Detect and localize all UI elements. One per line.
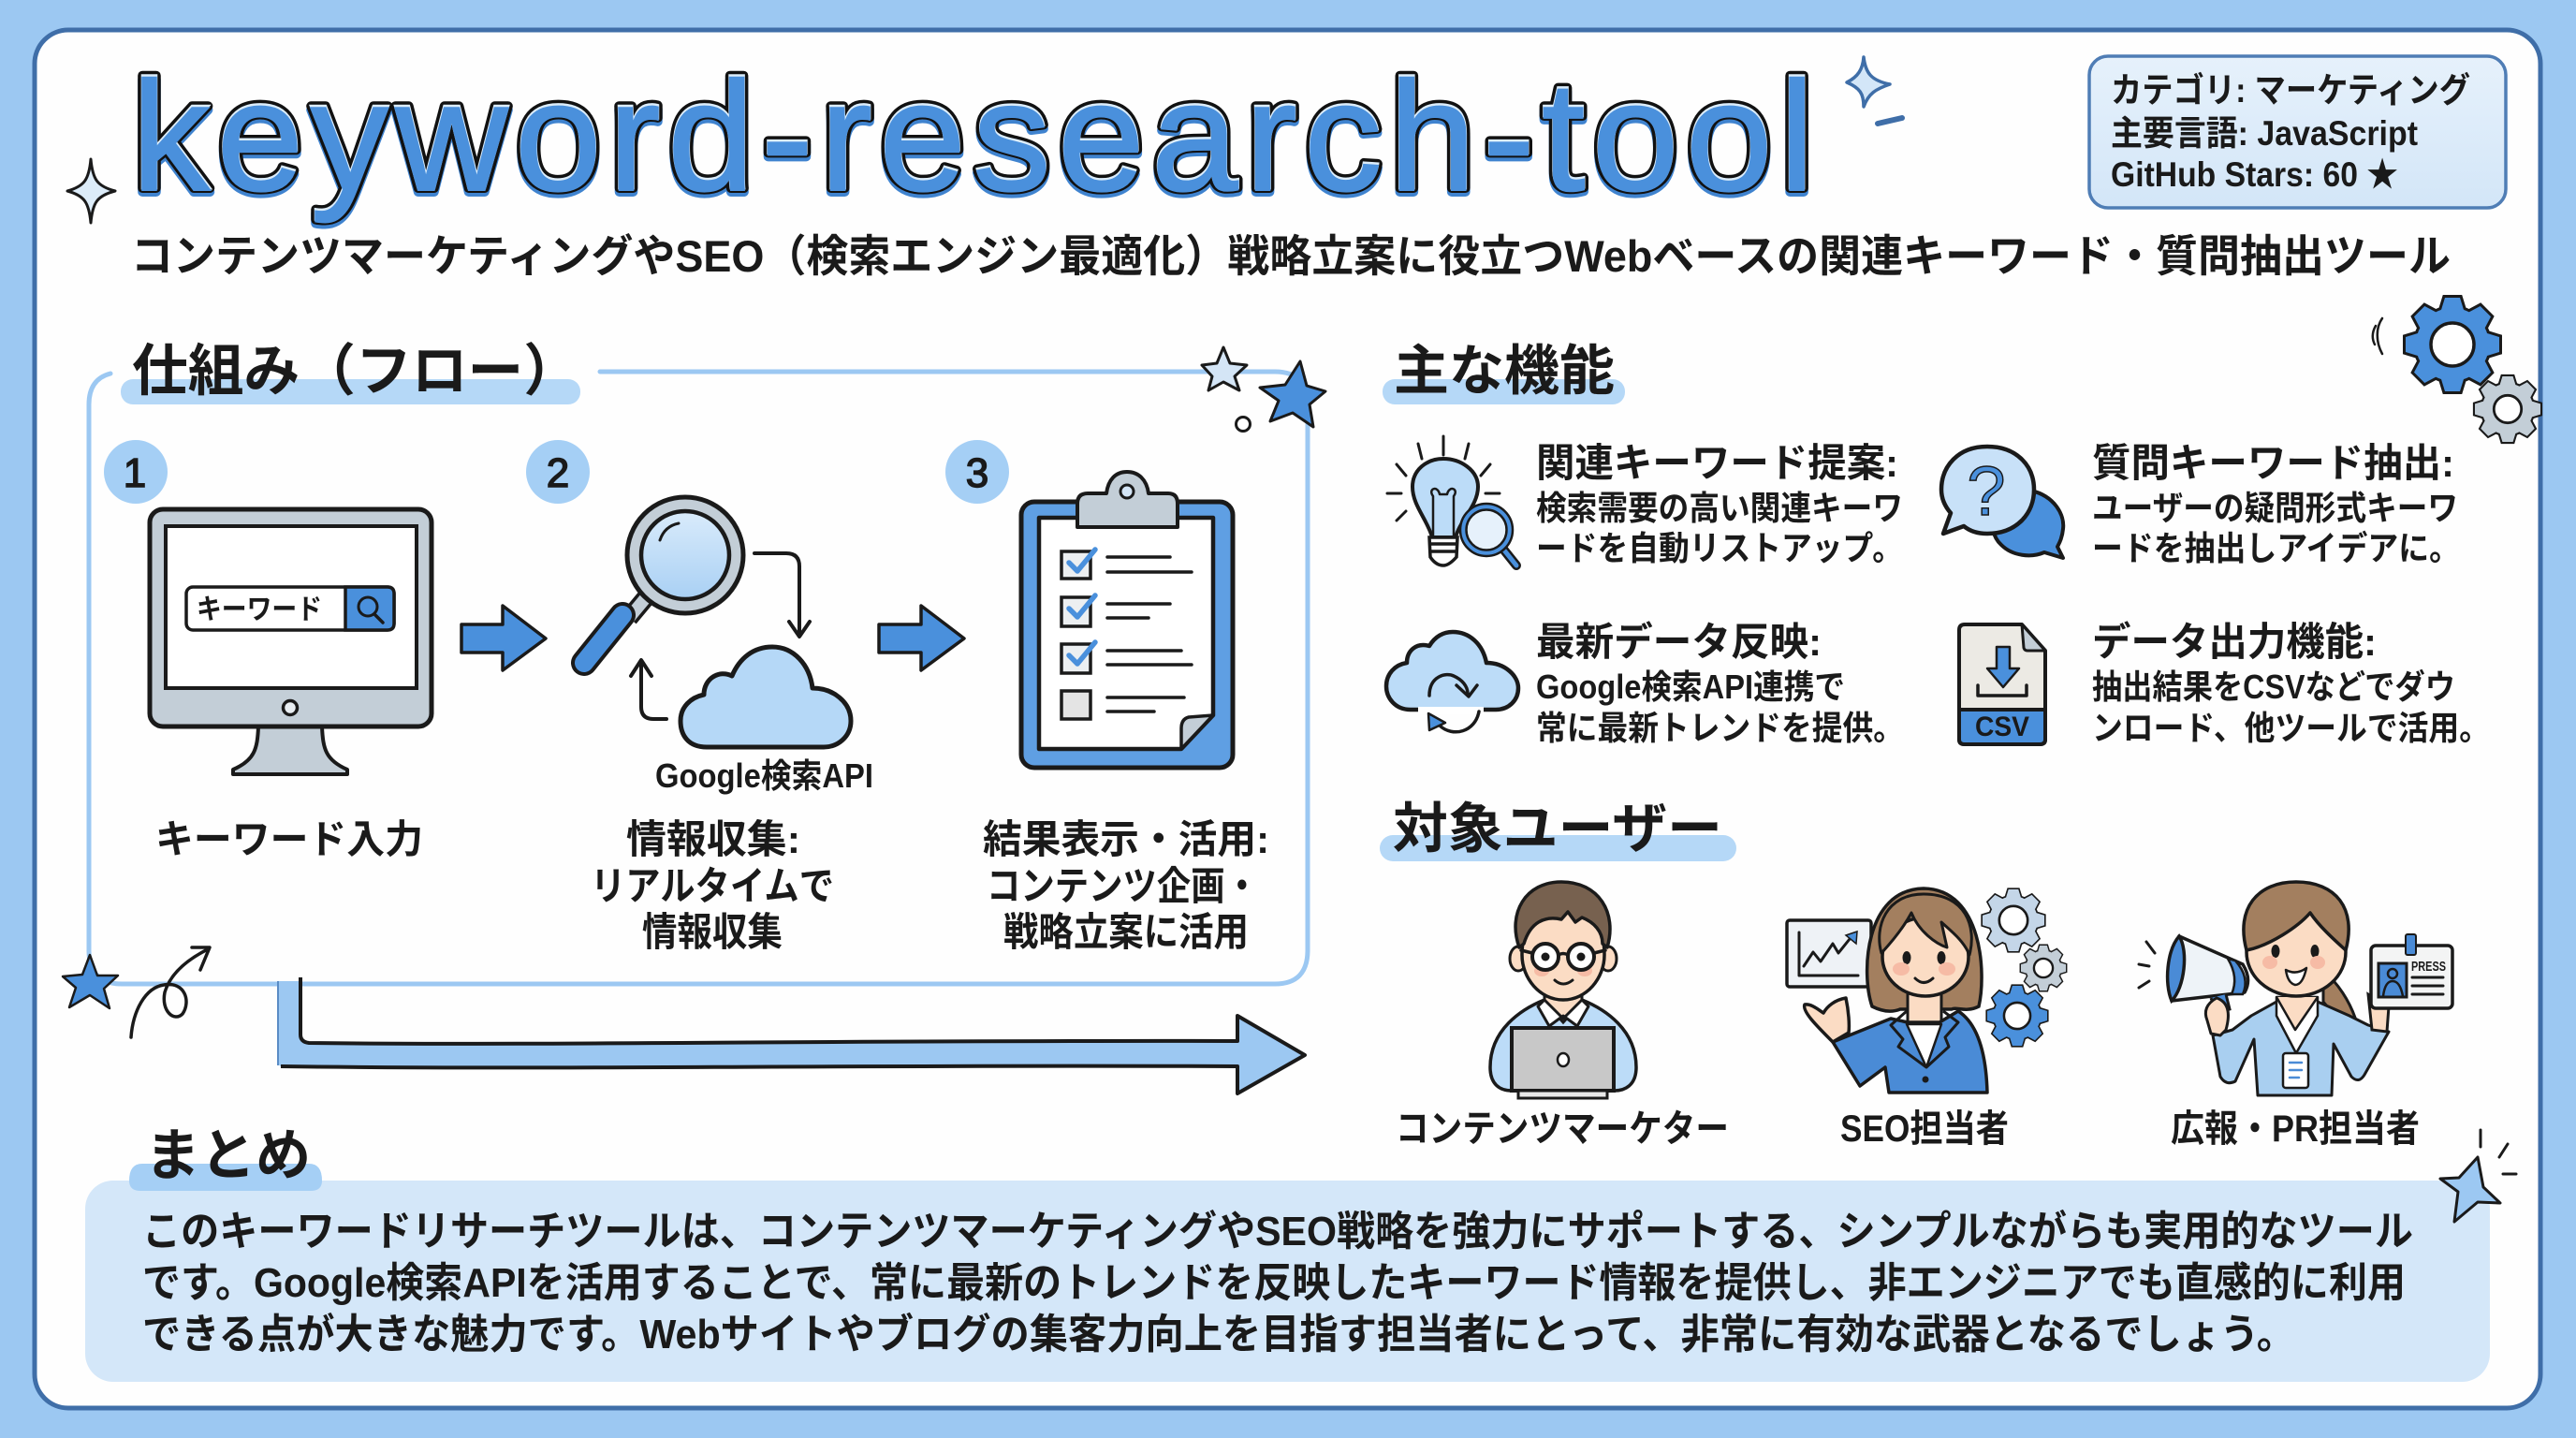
icon: small circle xyxy=(1236,418,1251,431)
feature: latest data: 最新データ反映: xyxy=(1536,620,1822,664)
step 3 label: 結果表示・活用: xyxy=(983,817,1269,861)
icon: monitor with search bar xyxy=(150,509,432,774)
panel: summary box xyxy=(85,1181,2490,1382)
icon: curly arrow xyxy=(131,947,210,1037)
icon: small star xyxy=(1202,347,1247,390)
step 1 badge xyxy=(104,440,168,504)
panel: flow frame xyxy=(89,372,1308,984)
press ID badge: PRESS xyxy=(2411,959,2446,975)
feature: data export xyxy=(1959,620,2490,747)
feature: related keywords xyxy=(1387,436,1903,567)
icon: question bubbles xyxy=(1941,447,2063,558)
feature: latest data xyxy=(1386,620,1904,747)
icon: cloud refresh xyxy=(1386,632,1518,732)
heading: summary: まとめ xyxy=(145,1124,311,1187)
feature: latest data: Google検索API連携で xyxy=(1536,668,1845,706)
step 2 label: 情報収集: xyxy=(626,817,800,861)
title: keyword-research-tool xyxy=(132,52,1814,226)
title: keyword-research-tool xyxy=(132,49,1814,222)
heading: features: 主な機能 xyxy=(1394,341,1615,402)
heading: target users: 対象ユーザー xyxy=(1393,799,1722,859)
arrow: step 2 to 3 xyxy=(879,606,964,670)
feature: related keywords: 検索需要の高い関連キーワ xyxy=(1536,489,1903,527)
icon: question bubbles: ? xyxy=(1967,452,2006,530)
megaphone xyxy=(2139,936,2248,1035)
icon: sparkle right xyxy=(1847,57,1902,124)
step 2 label: 情報収集 xyxy=(642,910,783,954)
label: Google search API: Google検索API xyxy=(655,756,873,795)
info: category: カテゴリ: マーケティング xyxy=(2111,70,2470,110)
step 3 label: コンテンツ企画・ xyxy=(987,864,1259,908)
label: content marketer: コンテンツマーケター xyxy=(1396,1108,1729,1150)
step 1 badge: 1 xyxy=(124,450,146,496)
icon: clipboard checklist xyxy=(1021,472,1233,768)
label: PR specialist: 広報・PR担当者 xyxy=(2171,1108,2420,1150)
chart board xyxy=(1787,920,1871,987)
info: stars: GitHub Stars: 60 ★ xyxy=(2111,155,2398,194)
heading: flow: 仕組み（フロー） xyxy=(132,340,579,403)
person: content marketer xyxy=(1490,882,1636,1098)
icon: CSV file: CSV xyxy=(1975,712,2029,742)
feature: question keywords: ユーザーの疑問形式キーワ xyxy=(2092,489,2458,527)
person: SEO specialist xyxy=(1787,888,2066,1093)
step 2 label xyxy=(591,817,834,954)
icon: magnifier xyxy=(584,497,743,663)
feature: question keywords xyxy=(1941,441,2460,567)
icon: light bulb with magnifier xyxy=(1387,436,1516,565)
step 3 badge xyxy=(945,440,1009,504)
step 3 badge: 3 xyxy=(966,450,988,496)
feature: data export: ンロード、他ツールで活用。 xyxy=(2092,709,2490,747)
heading highlight: features xyxy=(1383,379,1625,404)
step 2 badge: 2 xyxy=(547,450,569,496)
heading highlight: flow xyxy=(121,379,580,404)
search bar xyxy=(186,587,394,630)
summary text: このキーワードリサーチツールは、コンテンツマーケティングやSEO戦略を強力にサポートする、シンプルながらも実用的なツール xyxy=(142,1209,2413,1255)
icon: big star xyxy=(1260,361,1325,427)
icon: lower right star xyxy=(2440,1130,2516,1222)
info box xyxy=(2089,56,2506,208)
feature: related keywords: 関連キーワード提案: xyxy=(1536,441,1898,485)
icon: lower left star xyxy=(63,955,118,1008)
step 1 label: キーワード入力 xyxy=(155,817,423,861)
icon: sparkle left xyxy=(67,159,115,223)
subtitle: コンテンツマーケティングやSEO（検索エンジン最適化）戦略立案に役立つWebベースの関連キーワード・質問抽出ツール xyxy=(131,231,2451,281)
arrow: step 1 to 2 xyxy=(461,606,546,670)
summary text: できる点が大きな魅力です。Webサイトやブログの集客力向上を目指す担当者にとって、非常に有効な武器となるでしょう。 xyxy=(142,1312,2295,1357)
summary text xyxy=(142,1209,2413,1357)
title: keyword-research-tool xyxy=(132,51,1814,224)
icon: CSV file xyxy=(1959,624,2045,744)
heading highlight: summary xyxy=(129,1164,322,1191)
heading highlight: target users xyxy=(1380,835,1736,861)
person: PR specialist xyxy=(2139,882,2452,1095)
icon: big gear xyxy=(2406,298,2499,391)
info: language: 主要言語: JavaScript xyxy=(2111,114,2418,153)
search bar: キーワード xyxy=(197,594,322,625)
summary text: です。Google検索APIを活用することで、常に最新のトレンドを反映したキーワード情報を提供し、非エンジニアでも直感的に利用 xyxy=(142,1260,2406,1306)
feature: data export: 抽出結果をCSVなどでダウ xyxy=(2092,668,2455,706)
feature: related keywords: ードを自動リストアップ。 xyxy=(1536,529,1903,567)
icon: small gear xyxy=(2475,376,2540,442)
press ID badge xyxy=(2368,934,2452,1032)
step 2 label: リアルタイムで xyxy=(591,864,834,908)
arrow: big return arrow xyxy=(278,977,1305,1093)
icon: cloud with cycle arrows xyxy=(631,553,851,747)
title: keyword-research-tool xyxy=(132,49,1814,222)
feature: data export: データ出力機能: xyxy=(2092,620,2377,664)
feature: question keywords: 質問キーワード抽出: xyxy=(2092,441,2454,485)
feature: latest data: 常に最新トレンドを提供。 xyxy=(1536,709,1904,747)
step 2 badge xyxy=(526,440,590,504)
feature: question keywords: ードを抽出しアイデアに。 xyxy=(2092,529,2460,567)
label: SEO specialist: SEO担当者 xyxy=(1840,1108,2009,1150)
step 3 label: 戦略立案に活用 xyxy=(1003,910,1249,954)
icon: motion lines xyxy=(2373,318,2382,354)
step 3 label xyxy=(983,817,1269,954)
